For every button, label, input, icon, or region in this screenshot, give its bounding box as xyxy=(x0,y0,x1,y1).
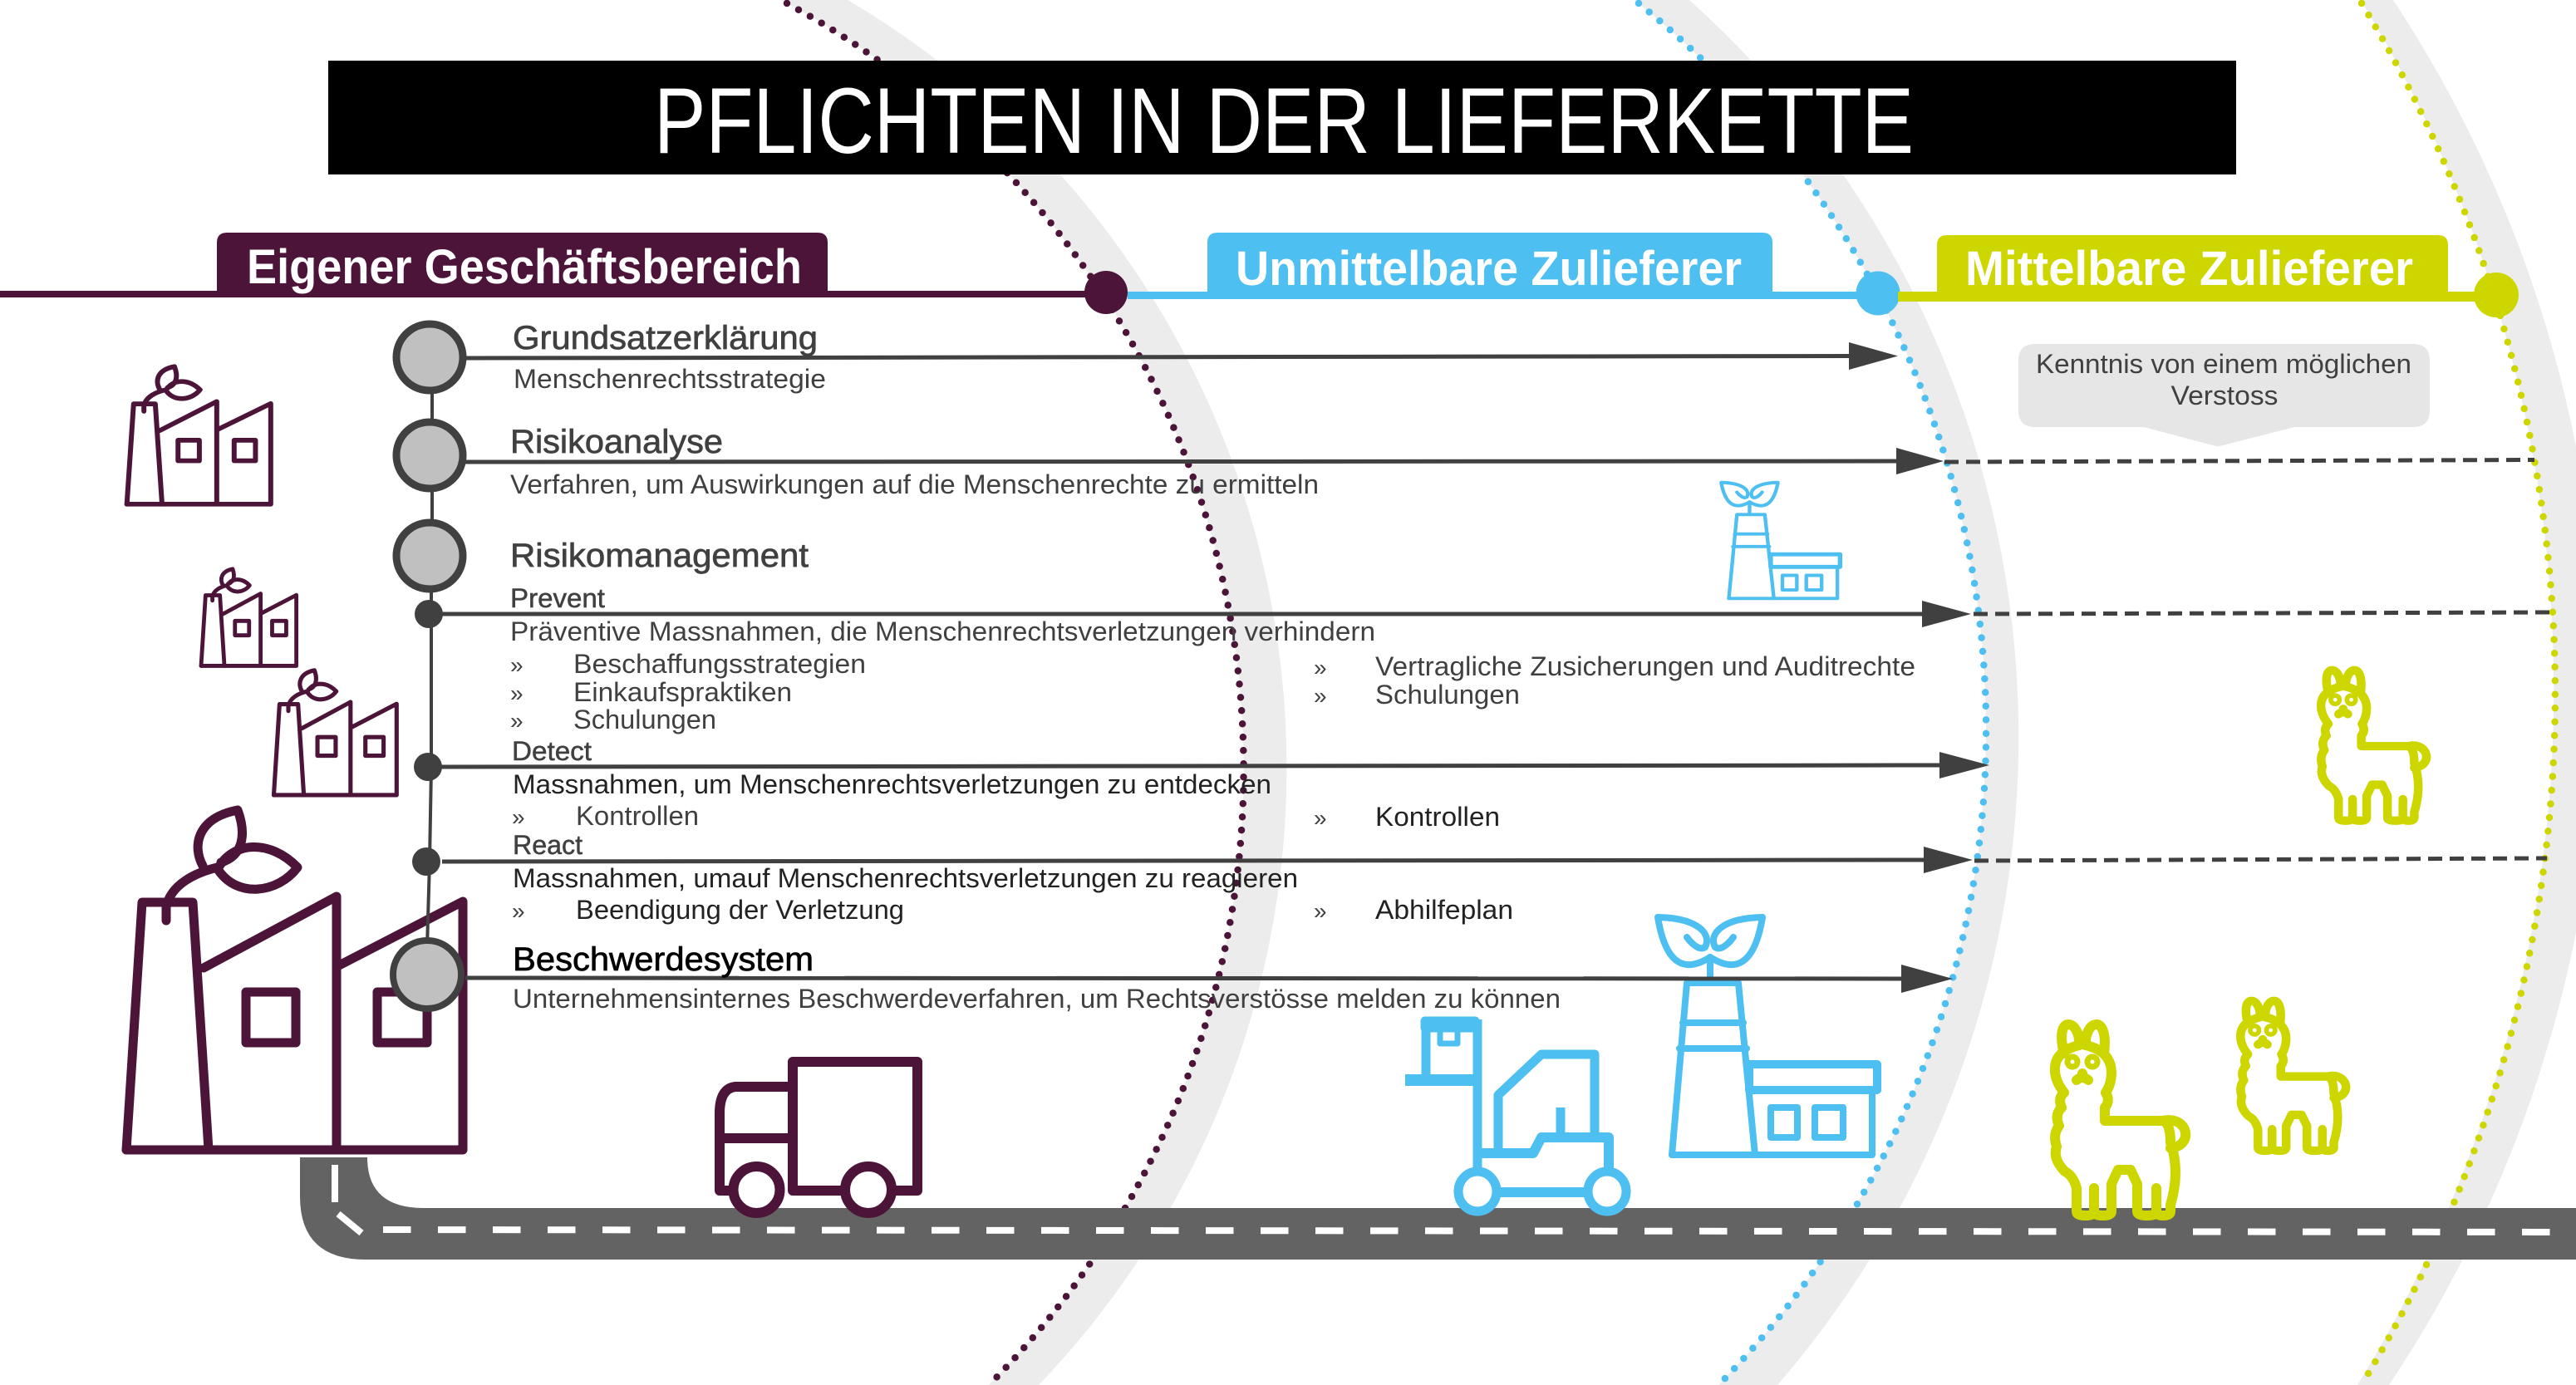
step: Prevent: » xyxy=(1314,655,1327,680)
step: Risikomanagement xyxy=(396,523,809,589)
callout: Kenntnis: Verstoss xyxy=(2170,381,2279,410)
icon: large llama xyxy=(2055,1024,2185,1216)
icon: right llama xyxy=(2240,1001,2346,1151)
step: Detect: Kontrollen xyxy=(576,801,699,831)
step: Detect xyxy=(414,736,1989,832)
title: PFLICHTEN IN DER LIEFERKETTE xyxy=(654,69,1914,173)
icon: forklift xyxy=(1405,1019,1626,1211)
step: Prevent: Schulungen xyxy=(1375,680,1520,710)
icon: large factory xyxy=(126,810,463,1150)
callout: Kenntnis xyxy=(2018,344,2430,446)
header: Unmittelbare Zulieferer xyxy=(1128,233,1900,316)
step: React: Beendigung der Verletzung xyxy=(576,895,904,925)
arc: purple dotted boundary xyxy=(787,3,1244,1379)
icon: large blue factory xyxy=(1658,917,1877,1155)
step: Risikoanalyse: Risikoanalyse xyxy=(510,424,723,460)
step: Prevent: » xyxy=(510,680,524,706)
step: Grundsatzerklärung: Menschenrechtsstrategie xyxy=(514,364,826,394)
icon: small factory middle xyxy=(201,569,297,665)
step: Risikoanalyse: Verfahren, um Auswirkungen auf die Menschenrechte zu ermitteln xyxy=(510,469,1319,499)
step: React: Massnahmen, umauf Menschenrechtsverletzungen zu reagieren xyxy=(513,863,1298,893)
header: Eigener Geschäftsbereich: Eigener Geschäftsbereich xyxy=(247,240,802,294)
step: Detect: » xyxy=(512,804,525,830)
step: Beschwerdesystem: Unternehmensinternes Beschwerdeverfahren, um Rechtsverstösse melden zu können xyxy=(513,984,1561,1014)
step: Grundsatzerklärung xyxy=(396,320,1898,394)
step: Prevent: Einkaufspraktiken xyxy=(573,677,792,707)
step: Prevent: Präventive Massnahmen, die Menschenrechtsverletzungen verhindern xyxy=(510,616,1375,646)
arc: green dotted boundary xyxy=(2362,3,2555,1379)
step: React: React xyxy=(513,830,583,860)
step: Beschwerdesystem: Beschwerdesystem xyxy=(513,941,814,978)
road xyxy=(300,1157,2576,1260)
step: Prevent xyxy=(415,583,2550,734)
step: React: » xyxy=(512,898,525,924)
step: Detect: Detect xyxy=(512,736,592,766)
step: Detect: » xyxy=(1314,805,1327,831)
background tier arcs xyxy=(781,0,2576,1385)
icon: small factory top xyxy=(127,366,271,504)
step: Grundsatzerklärung: Grundsatzerklärung xyxy=(513,320,818,356)
step: Risikomanagement: Risikomanagement xyxy=(510,538,809,574)
step: Detect: Massnahmen, um Menschenrechtsverletzungen zu entdecken xyxy=(513,769,1271,799)
arc: direct tier grey band xyxy=(1635,0,2018,1385)
step: Prevent: Beschaffungsstrategien xyxy=(573,649,866,679)
arc: own business grey band xyxy=(781,0,1286,1385)
header: Eigener Geschäftsbereich xyxy=(0,233,1128,314)
step: React xyxy=(412,830,2547,925)
arc: outer tier green band xyxy=(2357,0,2576,1385)
step: React: » xyxy=(1314,898,1327,924)
step: Prevent: » xyxy=(510,652,524,678)
header: Mittelbare Zulieferer: Mittelbare Zulieferer xyxy=(1965,242,2413,296)
step: Prevent: » xyxy=(1314,683,1327,709)
step: Risikoanalyse xyxy=(396,422,2534,499)
header: Mittelbare Zulieferer xyxy=(1898,235,2519,317)
step: Prevent: Prevent xyxy=(510,583,605,613)
step: Detect: Kontrollen xyxy=(1375,802,1500,832)
step: Prevent: Schulungen xyxy=(573,705,716,734)
icon: small blue factory xyxy=(1721,483,1840,598)
callout: Kenntnis: Kenntnis von einem möglichen xyxy=(2036,349,2411,379)
step: Prevent: Vertragliche Zusicherungen und Auditrechte xyxy=(1375,651,1915,681)
step: Prevent: » xyxy=(510,708,524,734)
timeline spine xyxy=(427,390,432,947)
header: Unmittelbare Zulieferer: Unmittelbare Zulieferer xyxy=(1236,242,1742,296)
icon: upper llama xyxy=(2321,670,2426,821)
arc: blue dotted boundary xyxy=(1639,3,1986,1379)
step: Beschwerdesystem xyxy=(393,941,1953,1014)
icon: truck xyxy=(720,1062,917,1213)
icon: small factory lower xyxy=(273,670,396,795)
step: React: Abhilfeplan xyxy=(1375,895,1513,925)
